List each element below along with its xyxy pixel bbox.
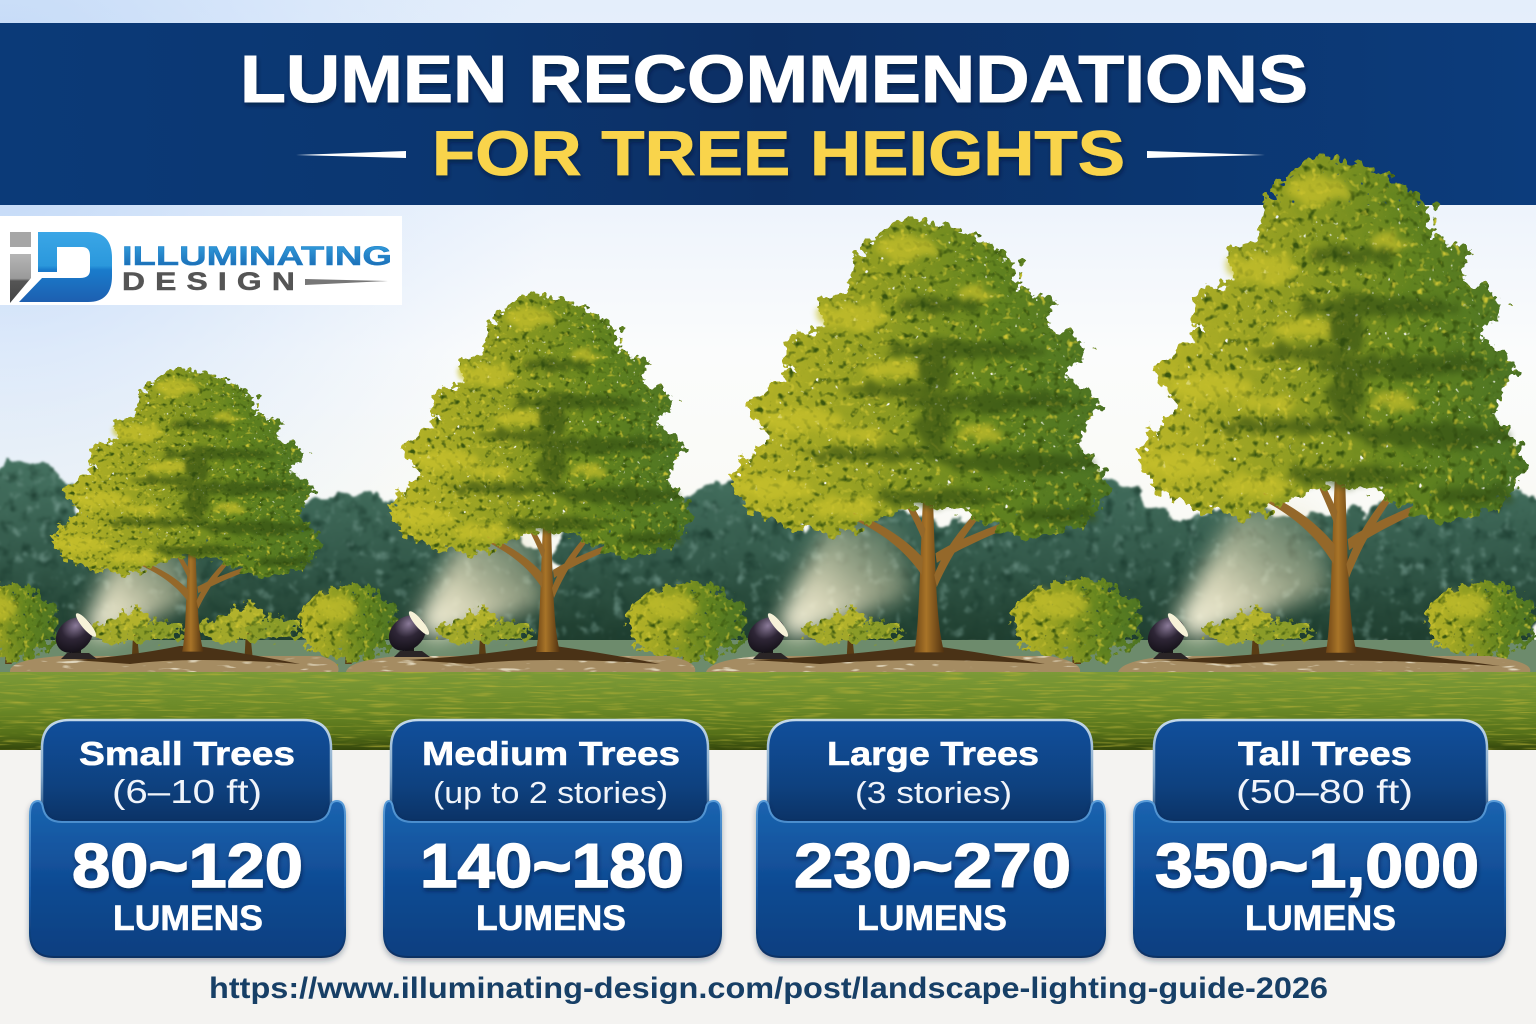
bottom panel background [0,750,1536,1024]
card: small trees [30,720,345,957]
spotlight 2 [382,608,433,658]
tree: small [50,367,319,652]
spotlight 1 [49,610,100,660]
lumen value: 230~270 [794,832,1071,901]
left ornament line [296,151,406,158]
card pocket [30,801,345,957]
title line one: LUMEN RECOMMENDATIONS [240,42,1308,117]
lumen value: 140~180 [420,832,684,901]
logo wordmark illuminating: ILLUMINATING [122,241,392,271]
background forest [0,462,1536,645]
lumen value: 350~1,000 [1155,832,1479,901]
card tab [391,720,708,830]
card pocket [757,801,1105,957]
tree: large [729,217,1107,652]
light beams [85,505,1330,640]
card: tall trees [1134,720,1505,957]
grass lawn [0,672,1536,750]
tree: tall [1136,154,1523,653]
lumens label: LUMENS [476,899,626,938]
lumens label: LUMENS [113,899,263,938]
right ornament line [1147,151,1265,158]
lumens label: LUMENS [1245,899,1396,938]
card height range: (6–10 ft) [112,773,262,810]
card heading: Medium Trees [422,735,680,772]
card pocket [384,801,721,957]
card pocket [1134,801,1505,957]
card: large trees [757,720,1105,957]
card tab [1154,720,1487,830]
title line two: FOR TREE HEIGHTS [432,119,1125,189]
card tab [42,720,331,830]
card heading: Small Trees [79,735,295,772]
lumen value: 80~120 [72,832,303,901]
card height range: (up to 2 stories) [433,775,668,810]
shrubs [0,580,1535,664]
spotlight 3 [741,610,792,660]
source url: https://www.illuminating-design.com/post/landscape-lighting-guide-2026 [209,972,1328,1005]
spotlight 4 [1141,610,1192,660]
sky background [0,0,1536,700]
meadow strip behind shrubs [0,640,1536,674]
logo [0,216,402,305]
title banner [0,23,1536,205]
card height range: (50–80 ft) [1236,773,1413,810]
card tab [768,720,1092,830]
mulch beds [10,646,1530,672]
logo mark [10,232,112,303]
logo swoosh [305,279,388,285]
lumens label: LUMENS [857,899,1007,938]
logo wordmark design: DESIGN [122,268,305,296]
card heading: Large Trees [827,735,1039,772]
card: medium trees [384,720,721,957]
card heading: Tall Trees [1238,735,1412,772]
card height range: (3 stories) [855,775,1012,810]
tree: medium [388,292,690,652]
